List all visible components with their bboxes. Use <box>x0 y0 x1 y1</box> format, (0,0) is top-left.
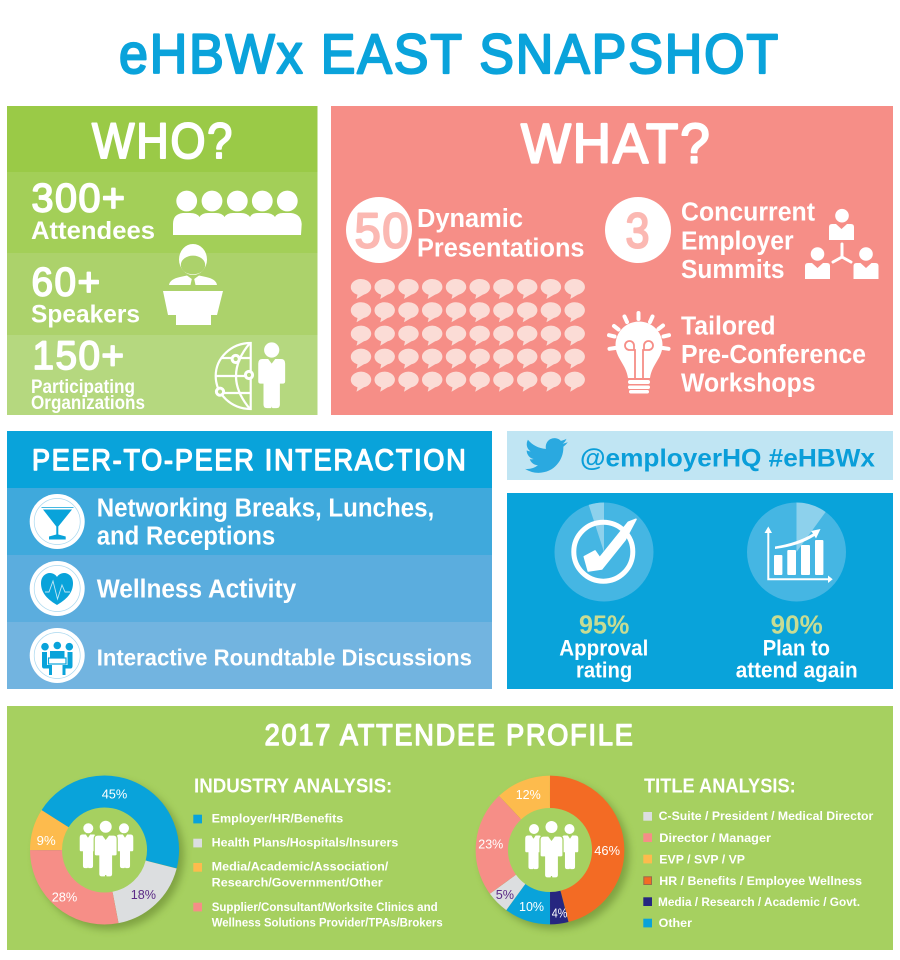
stat: speakers: Speakers <box>31 301 140 329</box>
stat: attendees: 300+ <box>32 176 126 220</box>
stat: 95 percent approval: 95% <box>579 611 629 639</box>
stat: attendees: Attendees <box>31 217 155 245</box>
panel: what <box>331 106 893 415</box>
stat: 95 percent approval: Approval <box>559 636 648 661</box>
stat: speakers <box>31 260 140 329</box>
legend: title: Other <box>659 916 692 930</box>
stat: 90 percent return: attend again <box>736 657 858 682</box>
donut chart: title: 23% <box>478 837 504 852</box>
text: tailored workshops: Tailored <box>681 312 776 340</box>
text: networking <box>97 495 434 550</box>
panel: twitter <box>507 431 893 480</box>
legend: title: Media / Research / Academic / Govt. <box>658 895 860 909</box>
legend: industry: Health Plans/Hospitals/Insurers <box>212 836 399 850</box>
text: roundtable: Interactive Roundtable Discussions <box>97 645 472 671</box>
icon: twitter bird <box>525 438 568 473</box>
donut chart: industry: 18% <box>131 887 156 902</box>
text: networking: Networking Breaks, Lunches, <box>97 495 434 523</box>
legend: industry: Research/Government/Other <box>212 876 383 890</box>
heading: who: WHO? <box>92 113 234 169</box>
legend: industry: Media/Academic/Association/ <box>212 860 389 874</box>
stat: organizations: Organizations <box>31 393 145 414</box>
panel: attendee profile <box>7 706 893 950</box>
heading: peer-to-peer: PEER-TO-PEER INTERACTION <box>32 444 468 477</box>
legend: industry: Supplier/Consultant/Worksite Clinics and <box>212 900 438 914</box>
icon: growth chart <box>747 502 846 602</box>
donut chart: title: 12% <box>516 787 541 802</box>
text: wellness: Wellness Activity <box>97 576 297 604</box>
badge: 50: 50 <box>354 204 410 258</box>
icon: globe and person <box>216 342 285 409</box>
legend: title: HR / Benefits / Employee Wellness <box>659 874 862 888</box>
heading: title analysis: TITLE ANALYSIS: <box>644 776 796 798</box>
legend: title: Director / Manager <box>659 831 771 845</box>
donut chart: industry: 45% <box>102 787 128 802</box>
legend: industry: Employer/HR/Benefits <box>212 812 344 826</box>
stat: 90 percent return <box>736 611 858 682</box>
donut chart: title: 10% <box>519 899 544 914</box>
donut chart: industry: 28% <box>52 890 78 905</box>
icon: speaker at podium <box>163 244 223 325</box>
icon grid: speech bubbles <box>351 279 585 392</box>
donut chart: title: 5% <box>496 887 514 902</box>
stat: attendees <box>31 176 155 245</box>
stat: 90 percent return: 90% <box>771 611 823 639</box>
donut chart: title <box>468 768 632 932</box>
stat: 95 percent approval <box>559 611 648 682</box>
heading: attendee profile: 2017 ATTENDEE PROFILE <box>265 719 635 752</box>
donut chart: title: 4% <box>552 906 568 921</box>
heading: industry analysis: INDUSTRY ANALYSIS: <box>194 776 392 798</box>
badge: 3 <box>605 197 671 263</box>
text: tailored workshops: Workshops <box>681 370 816 398</box>
title: eHBWx EAST SNAPSHOT <box>119 22 780 85</box>
legend: title <box>643 809 874 930</box>
text: dynamic presentations: Dynamic <box>417 205 523 233</box>
legend: industry <box>193 812 443 930</box>
icon: connected people <box>805 209 878 279</box>
icon: audience <box>173 191 302 235</box>
legend: title: C-Suite / President / Medical Director <box>659 809 874 823</box>
text: concurrent employer summits: Summits <box>681 256 784 284</box>
stat: 90 percent return: Plan to <box>763 636 830 661</box>
stat: speakers: 60+ <box>32 260 102 304</box>
legend: industry: Wellness Solutions Provider/TPAs/Brokers <box>212 916 443 930</box>
stat: organizations: Participating <box>31 377 135 398</box>
icon: roundtable <box>30 628 85 683</box>
icon: heart <box>30 561 85 616</box>
panel: peer-to-peer <box>7 431 492 689</box>
text: networking: and Receptions <box>97 522 275 550</box>
panel: ratings <box>507 493 893 689</box>
icon: people <box>525 821 578 878</box>
donut chart: title: 46% <box>594 843 620 858</box>
icon: martini <box>30 494 85 549</box>
badge: 3: 3 <box>626 204 650 258</box>
text: concurrent employer summits <box>681 199 815 284</box>
icon: people <box>80 821 133 877</box>
text: tailored workshops <box>681 312 866 398</box>
heading: what: WHAT? <box>521 112 712 175</box>
text: concurrent employer summits: Employer <box>681 228 794 256</box>
icon: approval check <box>554 502 654 602</box>
text: dynamic presentations: Presentations <box>417 235 584 263</box>
donut chart: industry <box>24 769 185 931</box>
donut chart: industry: 9% <box>37 833 56 848</box>
text: dynamic presentations <box>417 205 584 263</box>
text: concurrent employer summits: Concurrent <box>681 199 815 227</box>
text: handle: @employerHQ #eHBWx <box>580 445 875 473</box>
icon: light bulb <box>609 313 669 394</box>
stat: 95 percent approval: rating <box>576 657 632 682</box>
stat: organizations <box>31 334 145 414</box>
text: tailored workshops: Pre-Conference <box>681 341 866 369</box>
stat: organizations: 150+ <box>32 334 126 378</box>
legend: title: EVP / SVP / VP <box>659 852 745 866</box>
panel: who <box>7 106 318 415</box>
